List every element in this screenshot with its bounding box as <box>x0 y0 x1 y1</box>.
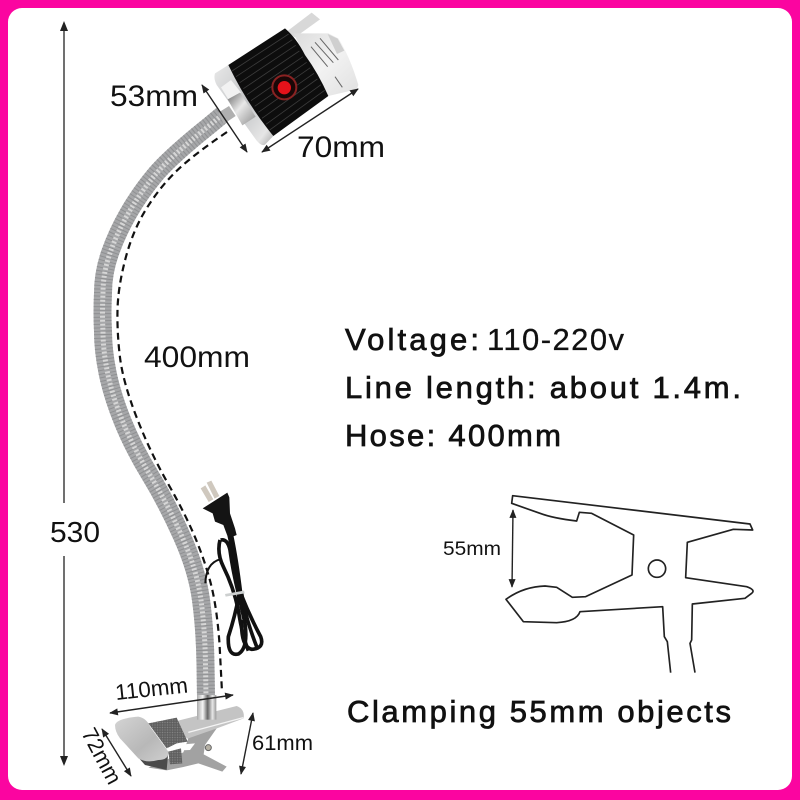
lamp rear silver cap with label <box>293 33 358 96</box>
dimension: clip height 61mm: 61mm <box>252 731 313 755</box>
spring opening <box>177 743 195 750</box>
dimension: head length 70mm <box>262 89 385 164</box>
dimension: clamp opening 55mm: 55mm <box>443 539 501 560</box>
dimension: head length 70mm: 70mm <box>297 131 385 164</box>
pivot pin <box>205 745 211 751</box>
lamp head <box>214 13 358 145</box>
dimension: overall height 530 <box>50 21 100 766</box>
gooseneck hose <box>102 115 222 697</box>
dimension: overall height 530: 530 <box>50 517 100 549</box>
plug body <box>203 493 237 538</box>
spec text block: Line length: about 1.4m. <box>345 370 741 405</box>
clamp outline diagram <box>506 496 753 673</box>
spec text block: 110-220v <box>487 322 624 357</box>
dimension: clip length 110mm <box>110 672 233 713</box>
clamp caption: Clamping 55mm objects <box>347 694 731 729</box>
metal stem <box>197 695 216 720</box>
dimension: clamp opening 55mm <box>443 510 513 587</box>
plug prongs <box>201 481 219 502</box>
lamp rear tab <box>287 13 320 37</box>
lamp front silver cap <box>214 65 273 145</box>
dimension: clip length 110mm: 110mm <box>114 672 189 705</box>
cord tie <box>225 591 245 597</box>
clip base <box>115 695 244 772</box>
spec text block: Voltage: <box>345 322 479 357</box>
dimension: head diameter 53mm <box>110 80 247 152</box>
spec text block <box>345 322 741 453</box>
upper clip plate <box>177 706 244 739</box>
press pad shadow <box>118 728 168 770</box>
dimension: hose label 400mm: 400mm <box>144 341 250 374</box>
mesh grip band <box>148 718 188 764</box>
power cord and plug <box>201 481 262 654</box>
dashed hose length guide <box>117 132 227 692</box>
spec text block: Hose: 400mm <box>345 418 561 453</box>
dimension: clip width 72mm: 72mm <box>77 724 127 788</box>
clamp outline <box>506 496 753 673</box>
dimension: clip height 61mm <box>241 713 313 774</box>
dimension: head diameter 53mm: 53mm <box>110 80 198 113</box>
press pad <box>115 717 168 761</box>
lamp neck <box>218 80 256 125</box>
lower clip jaw <box>148 728 227 772</box>
coiled cord <box>205 536 262 654</box>
lamp red button <box>272 75 296 99</box>
lamp black finned body <box>228 28 328 136</box>
